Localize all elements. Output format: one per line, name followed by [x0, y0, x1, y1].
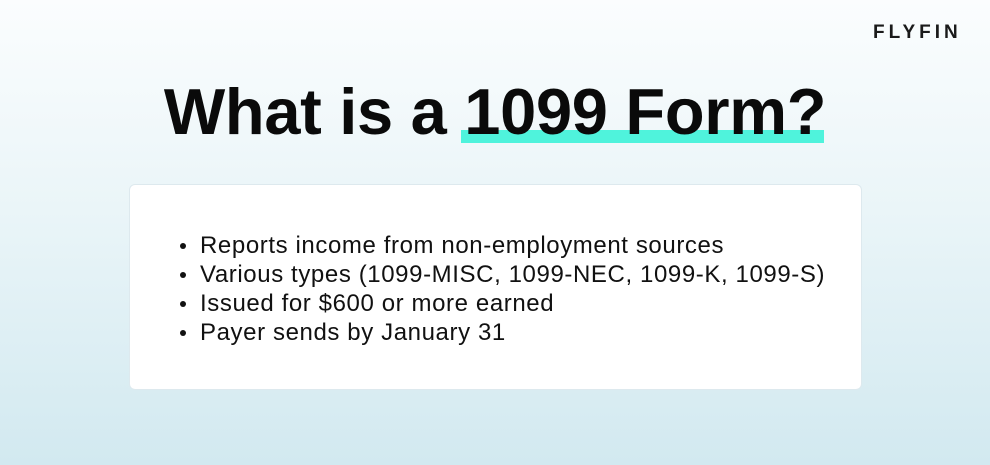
title: [164, 75, 826, 148]
bullet list: Payer sends by January 31: [200, 319, 506, 346]
bullet list: [180, 232, 825, 346]
panel: facts card: [129, 184, 862, 390]
bullet list: Various types (1099-MISC, 1099-NEC, 1099-K, 1099-S): [200, 261, 825, 288]
bullet list: Reports income from non-employment sources: [200, 232, 724, 259]
title: What is a: [164, 75, 446, 148]
title: 1099 Form?: [464, 75, 826, 148]
logo: FLYFIN: [873, 22, 962, 43]
bullet list: Issued for $600 or more earned: [200, 290, 554, 317]
